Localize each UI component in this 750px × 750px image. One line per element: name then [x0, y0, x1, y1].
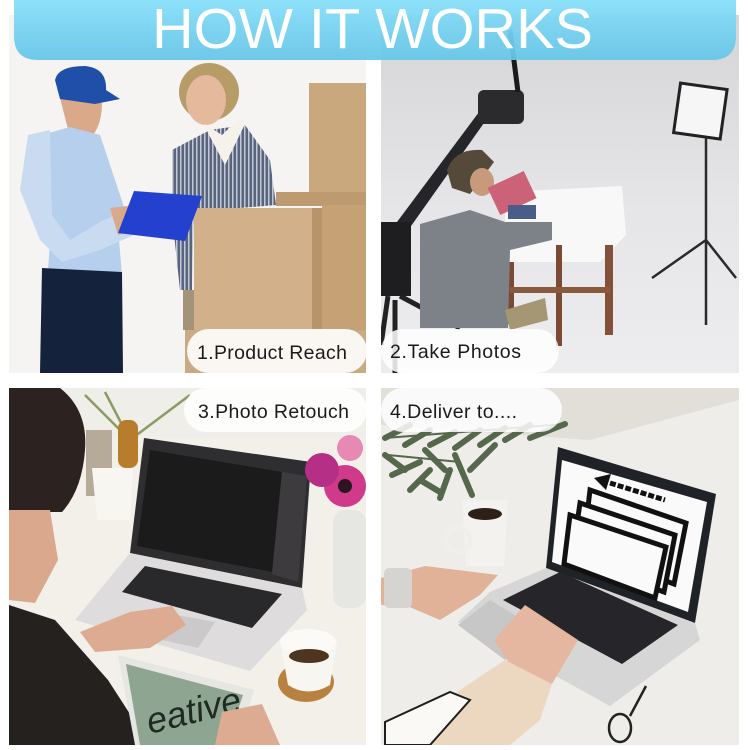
LED light on tripod	[652, 83, 736, 325]
label: deliver to	[381, 388, 562, 432]
tablet with lettering	[118, 655, 280, 745]
coffee cup left	[92, 468, 112, 496]
laptop showing layered frames	[458, 447, 716, 706]
panel: product reach photo	[9, 15, 366, 373]
plants and vase	[85, 392, 190, 496]
glass vase	[333, 510, 366, 608]
notebook	[385, 692, 470, 745]
label: photo retouch	[184, 388, 367, 432]
laptop with photo editor	[75, 438, 311, 671]
label: product reach: 1.Product Reach	[197, 342, 347, 364]
stacked cardboard boxes	[185, 83, 366, 373]
header banner	[14, 0, 736, 61]
camera crane	[381, 30, 524, 373]
panel: photo retouch	[9, 388, 366, 745]
panel: deliver	[381, 388, 739, 745]
label: product reach	[187, 329, 367, 373]
leafy plant	[385, 424, 565, 498]
icon: stacked frames and arrow	[564, 474, 686, 598]
blue clipboard	[118, 191, 202, 241]
coffee mug	[468, 508, 502, 520]
photographer	[420, 150, 552, 330]
label: take photos	[381, 329, 559, 373]
tablet with lettering: eative	[142, 679, 245, 742]
white table with wooden frame	[505, 186, 626, 346]
hands and sleeve	[381, 566, 578, 745]
woman in striped shirt	[172, 63, 276, 330]
glasses	[609, 686, 646, 742]
panel: take photos	[381, 15, 739, 373]
pink flowers	[305, 435, 366, 507]
woman from behind	[9, 388, 186, 745]
delivery man in blue shirt	[20, 66, 134, 373]
label: take photos: 2.Take Photos	[390, 341, 521, 363]
coffee cup and coaster	[278, 629, 337, 702]
label: deliver to: 4.Deliver to....	[390, 401, 517, 423]
label: photo retouch: 3.Photo Retouch	[198, 401, 349, 423]
